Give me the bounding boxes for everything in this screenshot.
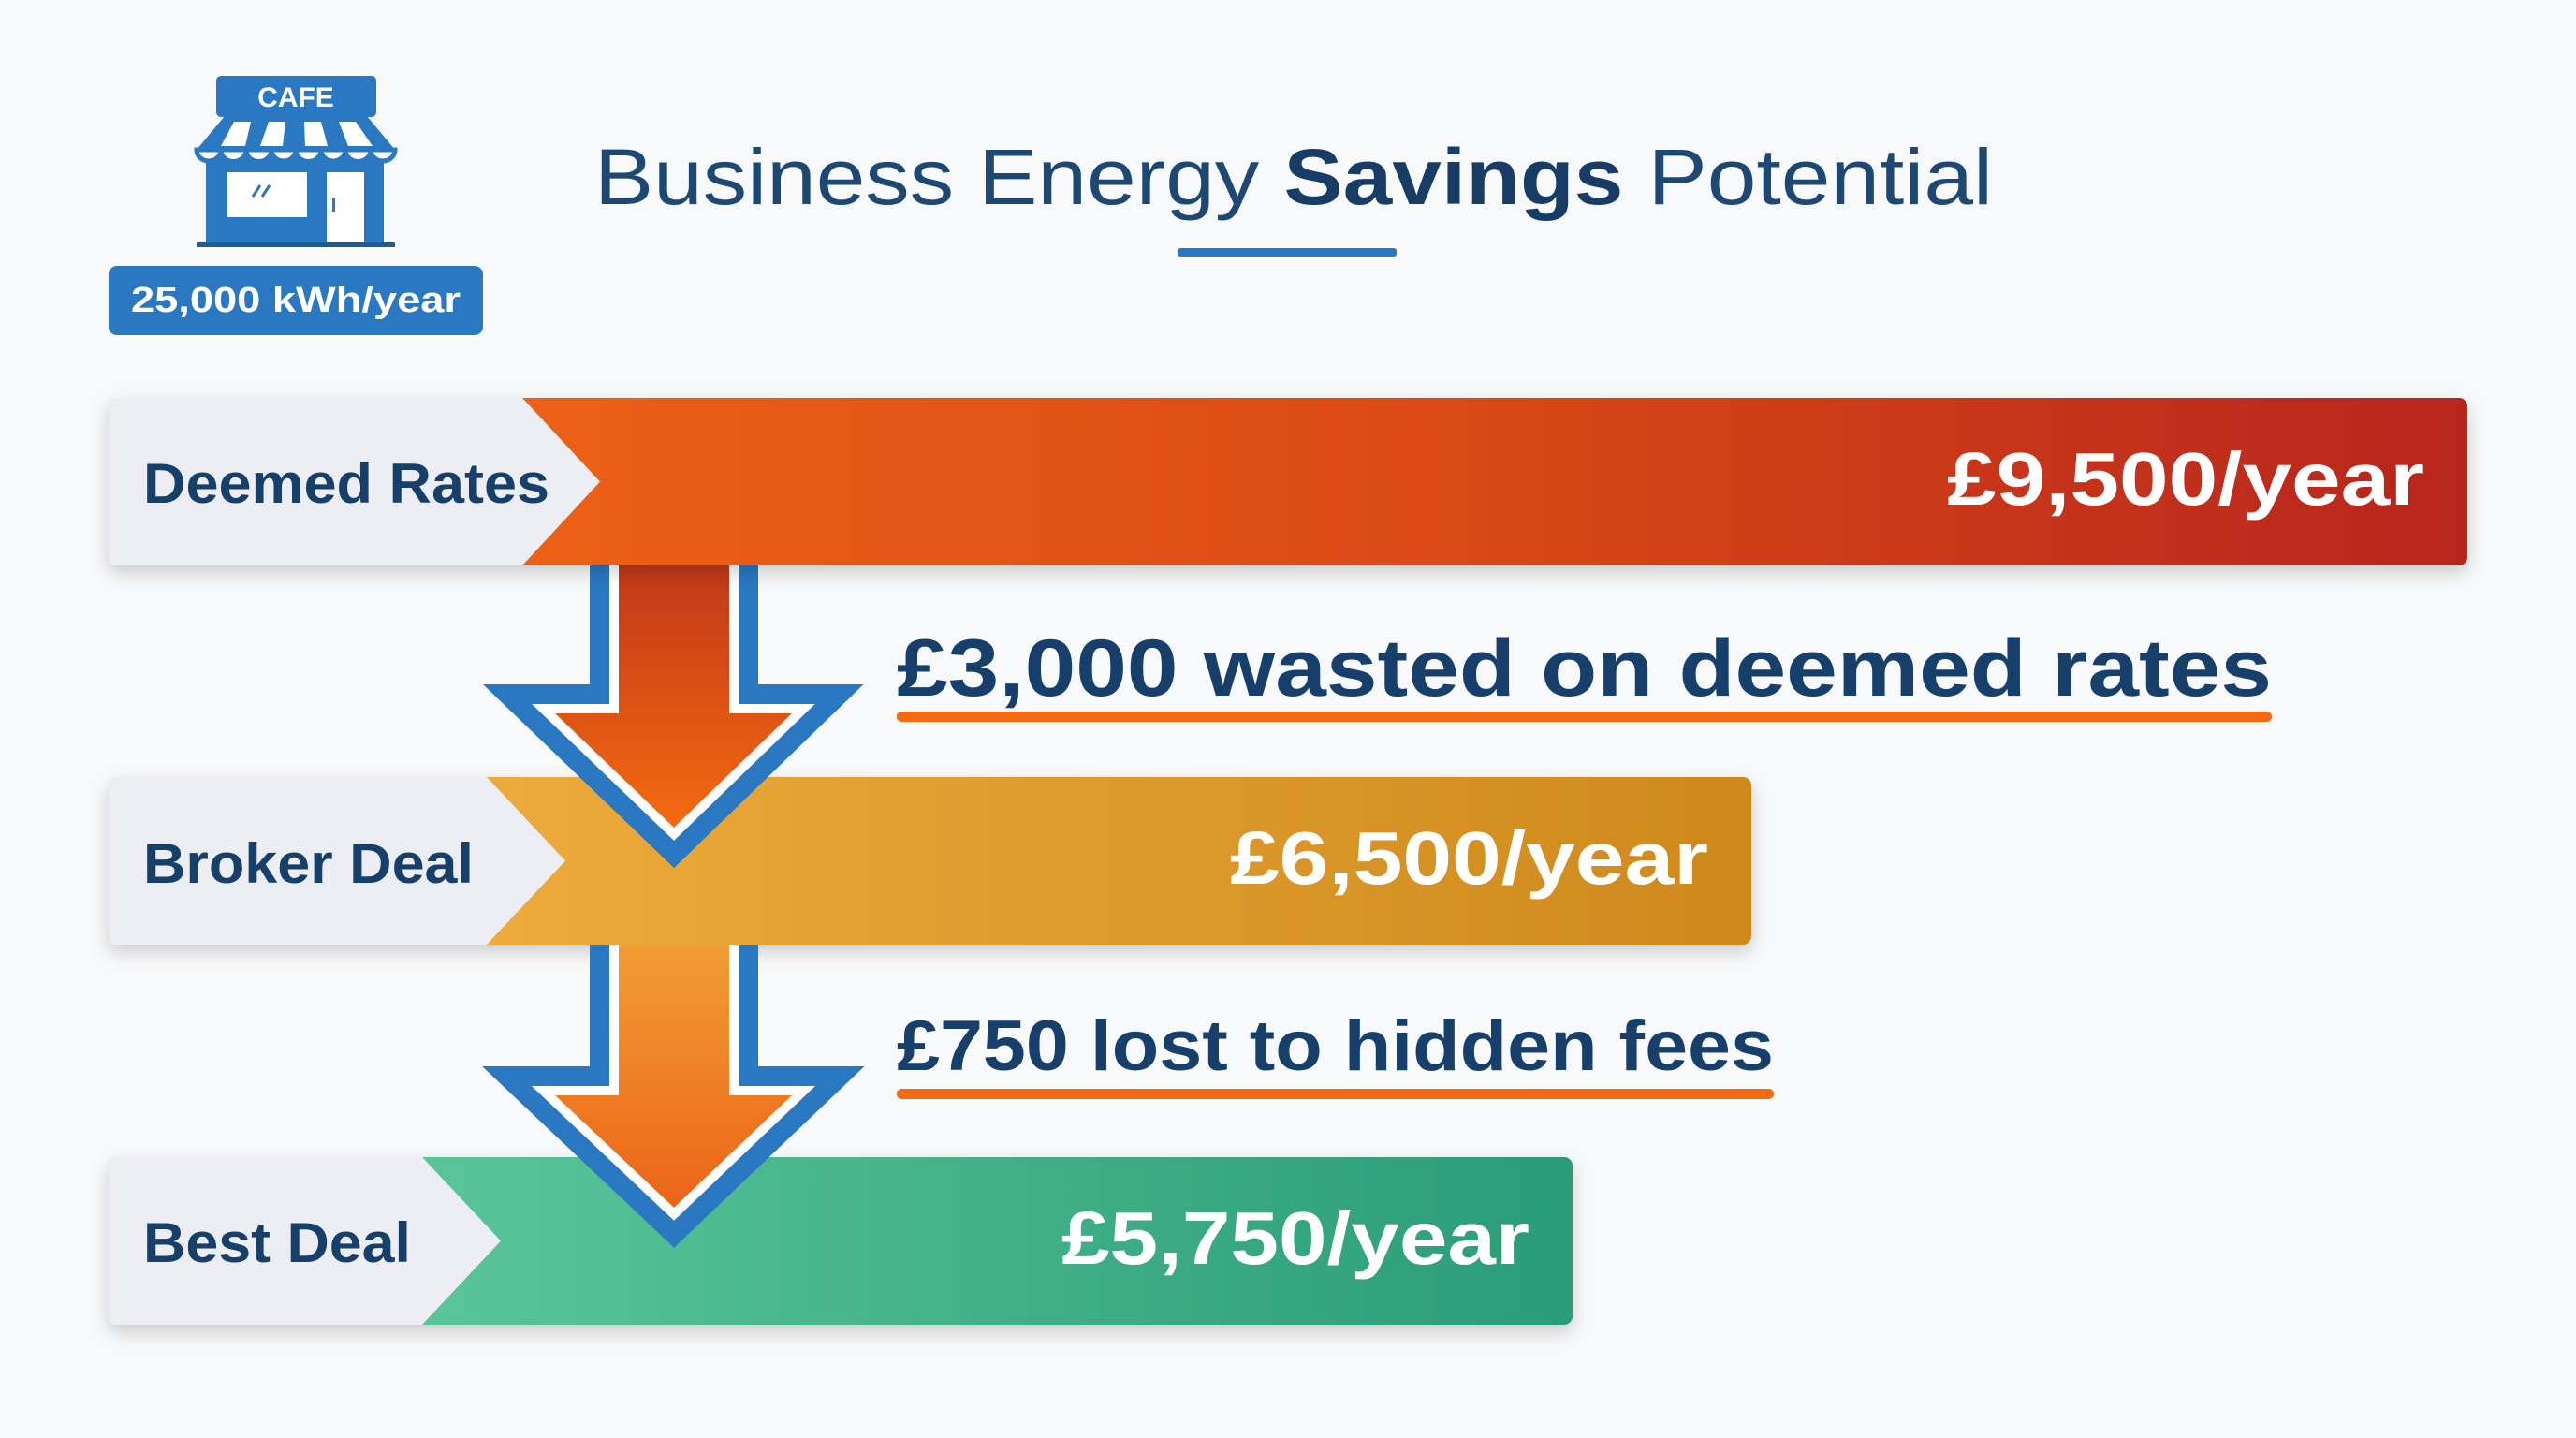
callout: £750 lost: £750 lost to hidden fees [897, 1006, 1774, 1086]
bar: broker deal [109, 777, 1751, 945]
bar: best deal [109, 1157, 1573, 1325]
badge: 25,000 kWh/year [109, 266, 483, 335]
icon: cafe storefront: CAFE [257, 82, 334, 113]
bar: deemed rates [109, 398, 2467, 565]
arrow: deemed to broker [555, 524, 792, 828]
title: Business Energy Savings Potential [594, 133, 1993, 221]
callout: £3,000 wasted: £3,000 wasted on deemed rates [897, 624, 2272, 713]
bar: deemed rates: Deemed Rates [143, 452, 549, 515]
arrow: broker to best [555, 899, 792, 1208]
bar: broker deal: £6,500/year [1230, 816, 1708, 900]
bar: broker deal: Broker Deal [143, 832, 474, 895]
bar: best deal: £5,750/year [1061, 1196, 1530, 1280]
title [594, 133, 1993, 257]
bar: best deal: Best Deal [143, 1211, 411, 1274]
badge: 25,000 kWh/year: 25,000 kWh/year [131, 281, 461, 320]
bar: deemed rates: £9,500/year [1947, 437, 2424, 521]
icon: cafe storefront [197, 76, 395, 247]
